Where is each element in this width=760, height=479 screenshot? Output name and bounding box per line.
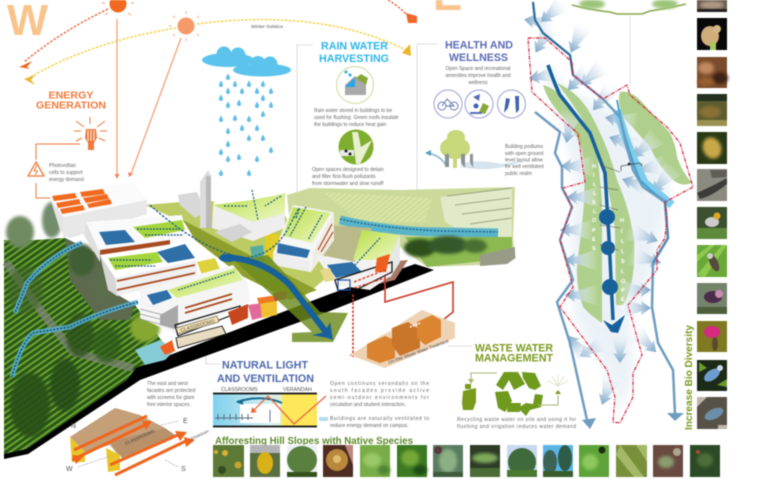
text: recycling: flushing and irrigation reduces water demand: [457, 424, 576, 430]
courtyard ground: [145, 200, 408, 320]
map: site boundary: [528, 38, 693, 423]
text: east and west facades: The east and west: [147, 381, 188, 387]
photo: dark foliage: [690, 445, 720, 477]
rain drops: [219, 74, 273, 176]
photo row: native species: [213, 445, 720, 477]
text: open space amenities: amenities improve health and: [445, 73, 511, 79]
text: open spaces: from stormwater and slow runoff: [312, 181, 384, 187]
photo column: wildlife: [697, 0, 728, 429]
photo: magenta bird: [697, 283, 727, 314]
text: rain storage: [314, 108, 399, 128]
heading: waste water management: WASTE WATER: [475, 342, 553, 354]
heading: health and wellness: [445, 40, 513, 64]
building: upper teaching block: [84, 215, 188, 262]
map: soft valley tint: [540, 60, 670, 415]
map: hillslopes labels: S: [592, 246, 596, 252]
photo: red stem shrub: [653, 445, 683, 477]
map: hillslopes labels: S: [592, 200, 596, 206]
map: hillslopes labels: P: [621, 288, 625, 294]
building: grey tower block: [178, 170, 211, 228]
orientation diagram: CLASSROOMS: [124, 428, 155, 446]
heading: waste water management: [475, 342, 553, 364]
building: middle teaching block: [100, 242, 197, 296]
text: building podiums: level layout allow: [505, 158, 543, 164]
photo: bright leaves: [360, 445, 390, 477]
map: hillslopes labels: O: [621, 279, 626, 285]
text: east and west facades: with screens for glare: [147, 395, 195, 401]
icon: recycling symbol: [495, 372, 543, 416]
text: verandahs: Open continuos verandahs on the: [330, 381, 429, 387]
text: building podiums: Building podiums: [505, 144, 544, 150]
text: building podiums: public realm: [505, 171, 532, 177]
photo: palm fronds: [616, 445, 647, 477]
map: hillslopes labels: S: [621, 259, 625, 265]
map: hillslopes labels: I: [593, 173, 595, 179]
map: hillslopes labels: L: [593, 209, 597, 215]
icon: bicycle: [434, 90, 462, 118]
forest hillside: [4, 202, 165, 457]
sun rays to roof: [114, 19, 181, 179]
orientation diagram: E: [183, 418, 188, 425]
photo: seed in hand: [323, 445, 353, 477]
building: lower classroom block: [135, 265, 250, 365]
classroom label: CLASSROOMS: [180, 318, 216, 334]
photo: conifer sky blue: [543, 445, 573, 477]
arrow: blue flow: [219, 254, 333, 340]
text: photovoltaic: Photovoltaic: [49, 163, 77, 169]
map: hillslopes labels: L: [621, 269, 625, 275]
text: east and west facades: free interior spaces.: [147, 402, 191, 408]
text: open space amenities: wellness: [468, 80, 488, 86]
text: recycling: Recycling waste water on site and using it for: [457, 417, 576, 423]
icon: sprinkler: [538, 374, 568, 405]
icon: summer sun: [102, 0, 134, 15]
text: verandahs: reduce energy demand on campus.: [330, 423, 409, 429]
photo: yellow flowers: [250, 445, 280, 477]
icon: winter sun: [169, 11, 199, 41]
text: open space amenities: Open Space and recreational: [445, 66, 511, 72]
panel: rain water harvesting: [297, 40, 417, 205]
map: hillslopes labels: L: [621, 239, 625, 245]
sun paths: [19, 0, 417, 85]
building: central block: [273, 205, 334, 272]
text: verandahs: semi-outdoor environments for: [330, 395, 429, 401]
photo: brown mammal: [697, 57, 728, 88]
photo: burrowing animal: [697, 94, 727, 126]
icon: toilet: [462, 373, 497, 410]
photo: lime leaves: [579, 445, 609, 477]
text: open space amenities: [445, 66, 511, 86]
section diagram: CLASSROOMS: [221, 387, 258, 393]
text: open spaces: Open spaces designed to detain: [312, 167, 384, 173]
photo: pink bird: [697, 321, 727, 352]
photo: dense foliage: [397, 445, 427, 477]
photo: yellow blossom shrub: [213, 445, 244, 477]
text: verandahs: Buildings are naturally ventilated to: [330, 416, 429, 422]
map: green hillslopes: [543, 83, 692, 323]
text: verandahs: south facades provide active: [330, 388, 429, 394]
map: top landscape section: [572, 0, 686, 86]
text: photovoltaic: energy demand: [49, 177, 84, 183]
map: hillslopes labels: I: [621, 229, 623, 235]
text: photovoltaic: [49, 163, 84, 183]
text: rain storage: used for flushing. Green roofs insulate: [314, 115, 399, 121]
heading: health and wellness: HEALTH AND: [445, 40, 513, 52]
icon: rain house: [336, 66, 374, 104]
photo: conifer sky pale: [507, 445, 537, 477]
text: east and west facades: facades are protected: [147, 388, 196, 394]
orientation diagram: N: [71, 423, 76, 430]
stormwater paths in forest: [12, 243, 138, 377]
map: hillslopes labels: H: [592, 164, 596, 170]
text: building podiums: for well ventilated: [505, 164, 544, 170]
text: open spaces: and filter first-flush pollutants: [312, 174, 376, 180]
icon: light bulb: [74, 117, 107, 150]
label: treatment: On-Site Waste Water Treatment: [388, 338, 450, 365]
photo: hummingbird in grass: [697, 245, 727, 277]
label: winter solstice: Winter Solstice: [251, 24, 283, 30]
text: verandahs: circulation and student interaction.: [330, 402, 406, 408]
photo: green tree: [287, 445, 317, 477]
map: hillslopes labels: L: [593, 182, 597, 188]
map: hillslopes labels: H: [620, 218, 624, 224]
section diagram: [213, 387, 328, 427]
building: eastern block: [315, 230, 400, 298]
icon: photovoltaic warning: [28, 162, 44, 176]
section diagram: VERANDAH: [283, 387, 312, 393]
map: left river: [533, 2, 675, 420]
arrow: olive flow: [235, 255, 348, 342]
panel: health and wellness: [417, 40, 544, 177]
text: open spaces: [312, 167, 384, 187]
map: hillslopes labels: O: [592, 218, 597, 224]
orientation diagram: VERANDAH: [189, 429, 210, 442]
photo: lizard: [697, 169, 727, 201]
map: hillslopes labels: E: [621, 297, 625, 303]
text: rain storage: Rain water stored in buildings to be: [314, 108, 392, 114]
text: photovoltaic: cells to support: [49, 170, 83, 176]
waste water treatment tank: [350, 310, 455, 368]
text: building podiums: [505, 144, 544, 177]
building: solar roof block: [50, 182, 147, 238]
stormwater path through courtyard: [150, 205, 299, 258]
solar panels: [52, 189, 112, 214]
treatment red pipe: [350, 276, 453, 357]
label: increase bio diversity: Increase Bio Diversity: [684, 325, 695, 430]
icon: rain clouds: [202, 46, 291, 76]
orientation diagram: W: [66, 466, 73, 473]
orientation diagram: [66, 408, 210, 475]
map: central channel: [548, 65, 625, 333]
heading: natural light and ventilation: [217, 360, 314, 385]
heading: health and wellness: WELLNESS: [449, 52, 508, 64]
connectors from solar panels: [36, 144, 80, 198]
map: hillslopes labels: L: [593, 191, 597, 197]
heading: natural light and ventilation: NATURAL LIGHT: [222, 360, 308, 372]
heading: natural light and ventilation: AND VENTILATION: [217, 373, 314, 385]
map: hillslopes labels: L: [621, 249, 625, 255]
text: building podiums: with open ground: [505, 151, 544, 157]
map: river arrowheads: [582, 413, 684, 429]
photo: golden flower: [697, 132, 727, 164]
heading: rain water harvesting: [319, 40, 389, 65]
map: hillslopes labels: P: [592, 228, 596, 234]
text: verandahs: [330, 381, 429, 429]
heading: energy generation: ENERGY: [48, 90, 94, 102]
icon: filter circle: [338, 130, 374, 164]
map: check dam marker: [621, 163, 642, 171]
text: east and west facades: [147, 381, 196, 408]
photo: broad leaf: [433, 445, 463, 477]
site section: hill: [287, 187, 516, 267]
photo: grey-blue bird: [697, 397, 727, 429]
heading: energy generation: [36, 90, 106, 112]
photo: blue bird: [697, 360, 727, 391]
icon: kite and play: [465, 90, 493, 118]
heading: energy generation: GENERATION: [36, 100, 106, 112]
photo: warbler: [697, 207, 727, 239]
heading: rain water harvesting: RAIN WATER: [321, 40, 388, 52]
icon: people: [498, 90, 526, 118]
terrain edge: [4, 264, 434, 459]
photo: animal 1: [697, 0, 727, 12]
text: rain storage: the buildings to reduce heat gain: [314, 122, 386, 128]
map: hillslopes labels: S: [621, 305, 625, 311]
building: green roof block: [212, 190, 285, 242]
heading: rain water harvesting: HARVESTING: [319, 53, 389, 65]
photo: small marsupial: [697, 18, 727, 50]
orientation diagram: S: [181, 466, 186, 473]
heading: waste water management: MANAGEMENT: [475, 352, 553, 364]
icon: tree and people: [425, 130, 521, 169]
heading: afforesting: Afforesting Hill Slopes with Native Species: [215, 435, 413, 447]
photo: tree fern: [470, 445, 500, 477]
map: hillslopes labels: E: [592, 237, 596, 243]
map: blue wind arrows: [522, 0, 683, 409]
text: recycling: [457, 417, 576, 430]
map: light blue stream: [617, 110, 672, 205]
map: hillslopes labels: [592, 164, 626, 311]
